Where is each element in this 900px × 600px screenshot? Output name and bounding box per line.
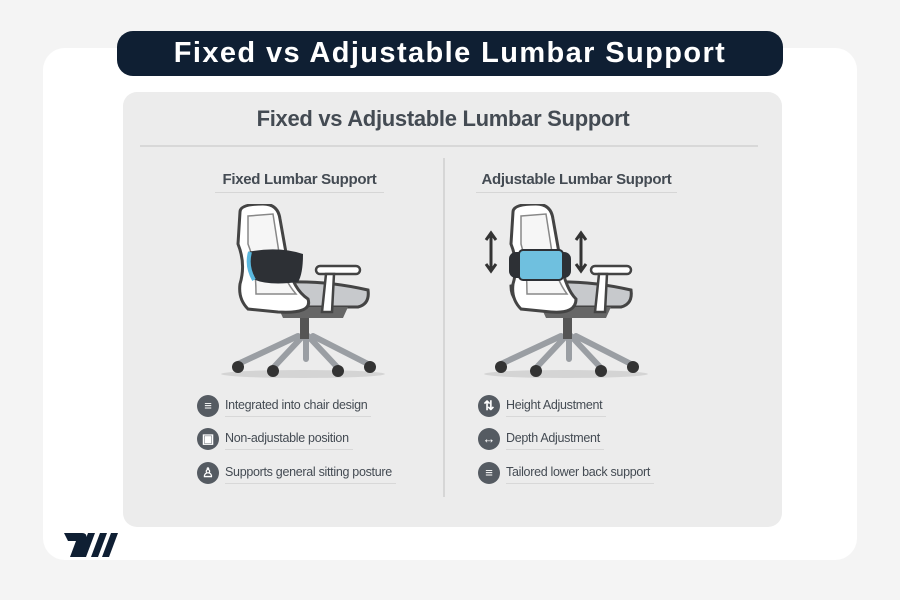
- list item: tailored: [478, 462, 654, 484]
- list item: non-adjustable: [197, 428, 353, 450]
- list item: height: Height Adjustment: [506, 398, 602, 412]
- white card: [43, 48, 857, 560]
- list item: depth: Depth Adjustment: [506, 431, 600, 445]
- list item: tailored: ≡: [485, 465, 493, 480]
- list item: tailored: Tailored lower back support: [506, 465, 650, 479]
- logo: [64, 533, 118, 557]
- list item: non-adjustable: ▣: [202, 431, 214, 446]
- list item: supports posture: Supports general sitting posture: [225, 465, 392, 479]
- chart: adjustable chair illustration: [484, 204, 648, 378]
- divider: [140, 145, 758, 146]
- list item: integrated: [197, 395, 371, 417]
- subheading: adjustable: Adjustable Lumbar Support: [481, 171, 672, 188]
- title: Fixed vs Adjustable Lumbar Support: [174, 37, 726, 69]
- list item: height: [478, 395, 606, 417]
- list item: depth: ↔: [482, 431, 496, 446]
- list item: integrated: Integrated into chair design: [225, 398, 367, 412]
- subheading: fixed: Fixed Lumbar Support: [222, 171, 376, 188]
- panel: comparison: [123, 92, 782, 527]
- list item: depth: [478, 428, 604, 450]
- list item: integrated: ≡: [204, 398, 212, 413]
- panel heading: Fixed vs Adjustable Lumbar Support: [257, 106, 629, 131]
- list item: height: ⇅: [484, 398, 494, 413]
- title: [117, 31, 783, 76]
- list item: supports posture: [197, 462, 396, 484]
- list item: supports posture: ♙: [202, 465, 214, 480]
- list item: non-adjustable: Non-adjustable position: [225, 431, 349, 445]
- chart: fixed chair illustration: [221, 204, 385, 378]
